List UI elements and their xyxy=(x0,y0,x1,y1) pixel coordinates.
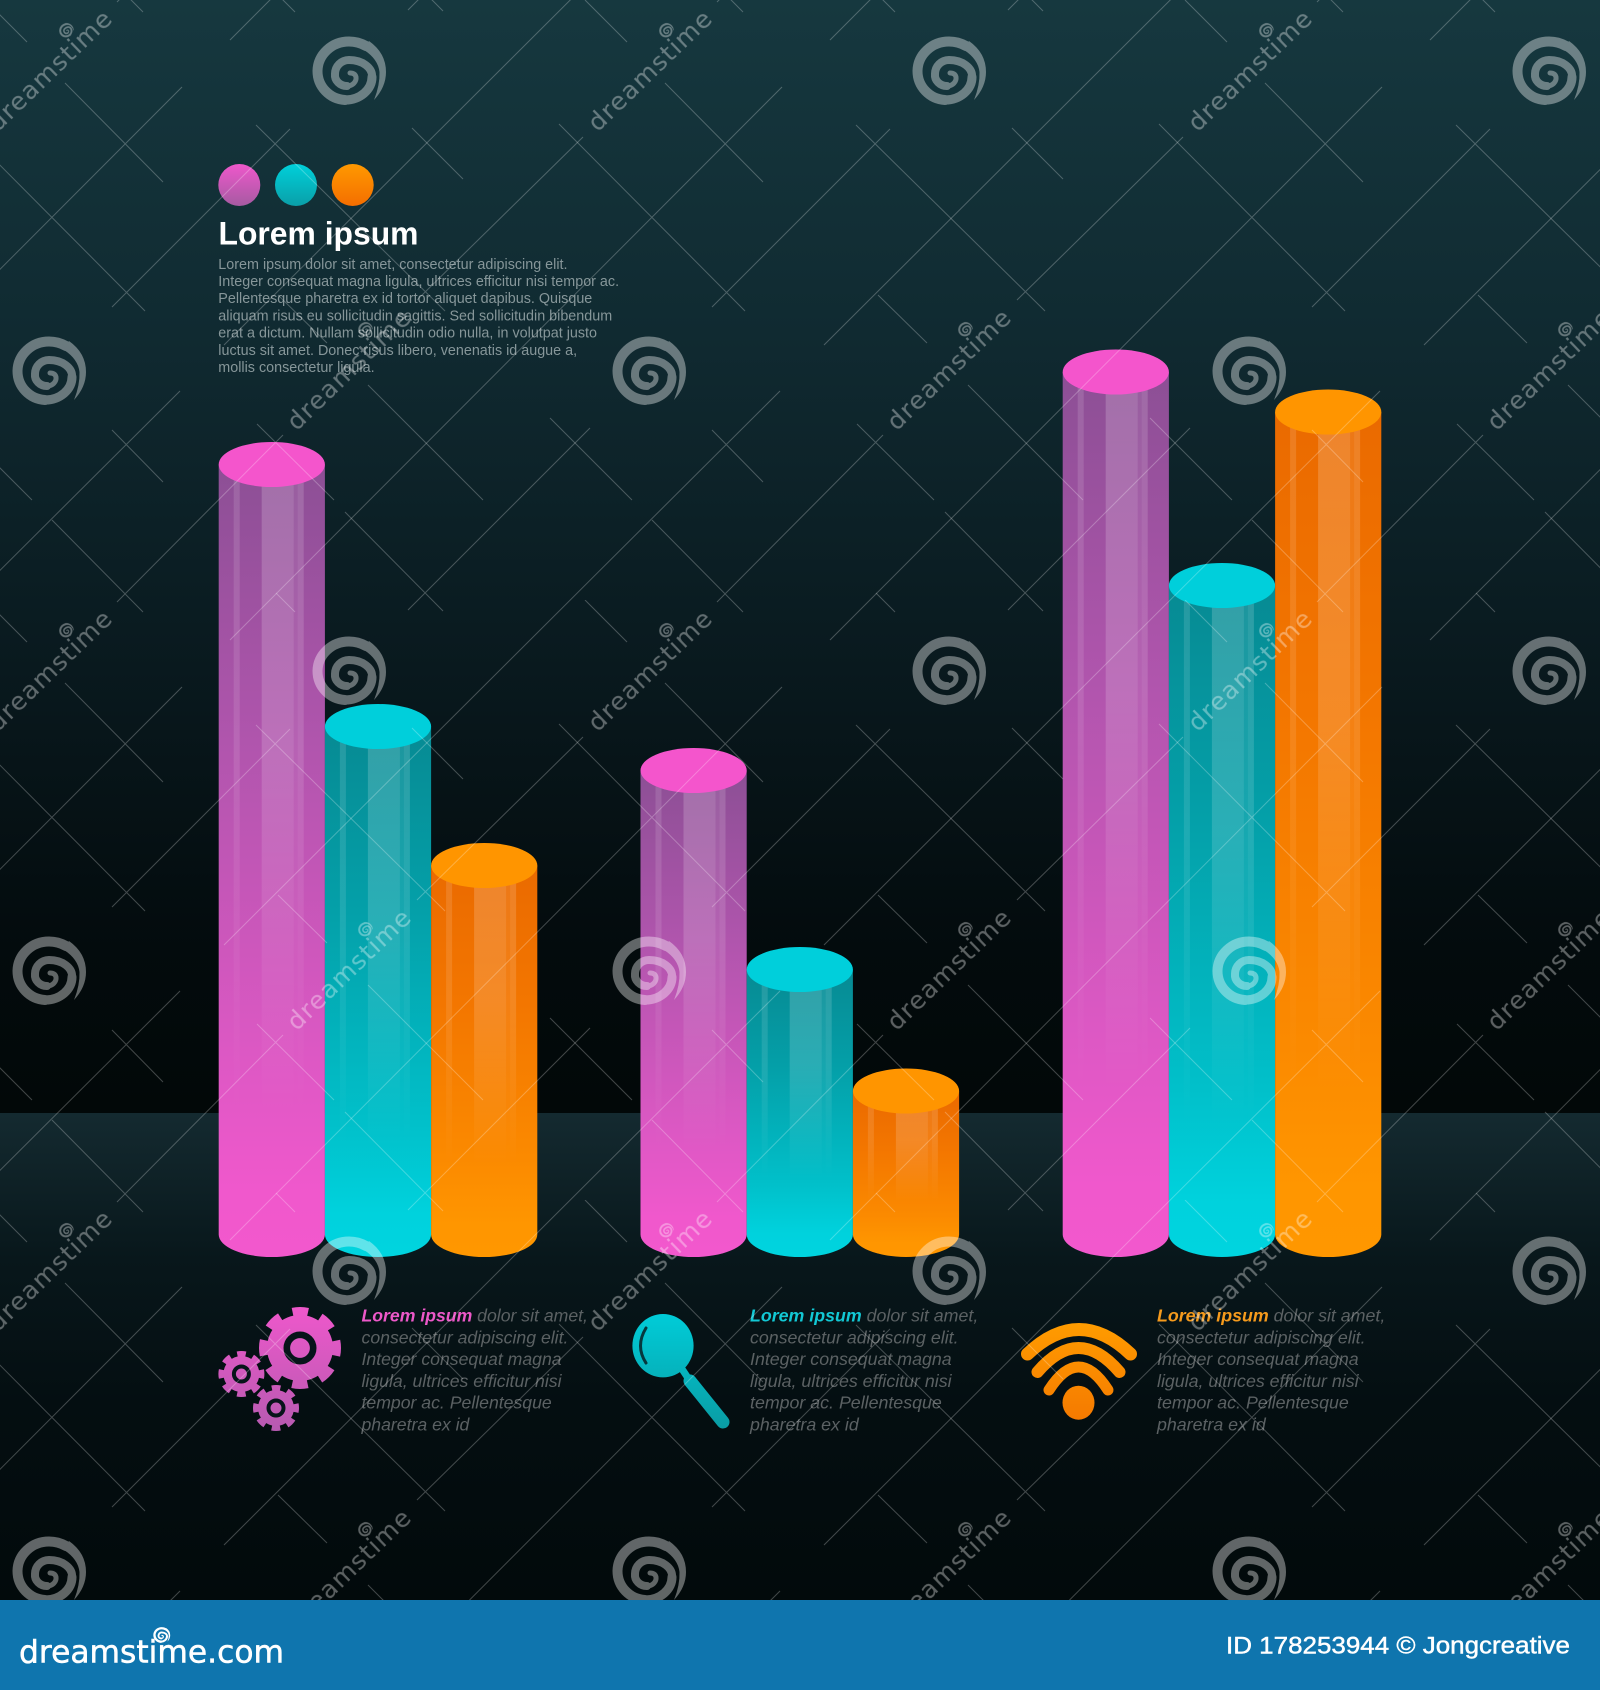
watermark text: dreamstime xyxy=(1182,604,1318,737)
watermark text: dreamstime xyxy=(1182,4,1318,137)
title: Lorem ipsum xyxy=(218,216,418,252)
bar group 2 xyxy=(640,748,959,1257)
footer logo: dreamstime.com xyxy=(19,1635,284,1671)
caption 2: Lorem ipsum dolor sit amet, xyxy=(750,1306,978,1326)
intro text block: erat a dictum. Nullam sollicitudin odio nulla, in volutpat justo xyxy=(218,326,597,342)
watermark text: dreamstime xyxy=(881,1503,1017,1636)
intro text block: mollis consectetur ligula. xyxy=(218,360,375,376)
caption 2: pharetra ex id xyxy=(749,1414,860,1434)
watermark text: dreamstime xyxy=(582,604,718,737)
intro text block: luctus sit amet. Donec risus libero, venenatis id augue a, xyxy=(218,343,577,359)
caption 1: ligula, ultrices efficitur nisi xyxy=(362,1371,563,1391)
caption 2 xyxy=(749,1306,978,1434)
caption 1: Lorem ipsum dolor sit amet, xyxy=(362,1306,588,1326)
intro text block: aliquam risus eu sollicitudin sagittis. Sed sollicitudin bibendum xyxy=(218,308,612,324)
bar: group 2 teal xyxy=(747,947,853,1257)
watermark text: dreamstime xyxy=(582,1204,718,1337)
caption 3: Lorem ipsum dolor sit amet, xyxy=(1157,1306,1385,1326)
caption 2: tempor ac. Pellentesque xyxy=(750,1393,942,1413)
bar: group 1 orange xyxy=(431,843,537,1257)
caption 2: Integer consequat magna xyxy=(750,1349,952,1369)
icon: gears xyxy=(221,1312,336,1428)
caption 1: tempor ac. Pellentesque xyxy=(362,1393,552,1413)
intro text block xyxy=(218,257,619,376)
watermark text: dreamstime xyxy=(281,903,417,1036)
bar: group 3 orange xyxy=(1275,390,1381,1257)
watermark text: dreamstime xyxy=(281,1503,417,1636)
caption 3: consectetur adipiscing elit. xyxy=(1157,1327,1366,1347)
bar: group 2 pink xyxy=(640,748,747,1257)
icon: magnifier xyxy=(632,1314,723,1422)
intro text block: Pellentesque pharetra ex id tortor aliquet dapibus. Quisque xyxy=(218,291,592,307)
watermark text: dreamstime xyxy=(582,4,718,137)
intro text block: Integer consequat magna ligula, ultrices efficitur nisi tempor ac. xyxy=(218,274,619,290)
caption 1: consectetur adipiscing elit. xyxy=(362,1327,568,1347)
legend dots xyxy=(218,164,374,206)
caption 1 xyxy=(360,1306,588,1434)
bar group 1 xyxy=(219,442,537,1257)
bar: group 2 orange xyxy=(853,1068,959,1257)
icon: wifi xyxy=(1028,1330,1130,1420)
bar chart xyxy=(219,350,1381,1257)
intro text block: Lorem ipsum dolor sit amet, consectetur adipiscing elit. xyxy=(218,257,568,273)
bar group 3 xyxy=(1063,350,1381,1257)
caption 1: Integer consequat magna xyxy=(362,1349,562,1369)
footer band xyxy=(0,1600,1600,1690)
footer credit: ID 178253944 © Jongcreative xyxy=(1226,1632,1570,1659)
bar: group 1 teal xyxy=(325,704,431,1257)
watermark text: dreamstime xyxy=(881,903,1017,1036)
bar: group 3 teal xyxy=(1169,563,1275,1257)
caption 3: pharetra ex id xyxy=(1156,1414,1267,1434)
caption 3: tempor ac. Pellentesque xyxy=(1157,1393,1349,1413)
caption 2: consectetur adipiscing elit. xyxy=(750,1327,959,1347)
watermark text: dreamstime xyxy=(1182,1204,1318,1337)
watermark text: dreamstime xyxy=(281,303,417,436)
bar: group 3 pink xyxy=(1063,350,1169,1257)
caption 2: ligula, ultrices efficitur nisi xyxy=(750,1371,953,1391)
caption 3 xyxy=(1156,1306,1385,1434)
caption 3: ligula, ultrices efficitur nisi xyxy=(1157,1371,1360,1391)
caption 1: pharetra ex id xyxy=(360,1414,471,1434)
caption 3: Integer consequat magna xyxy=(1157,1349,1359,1369)
watermark text: dreamstime xyxy=(881,303,1017,436)
bar: group 1 pink xyxy=(219,442,325,1257)
